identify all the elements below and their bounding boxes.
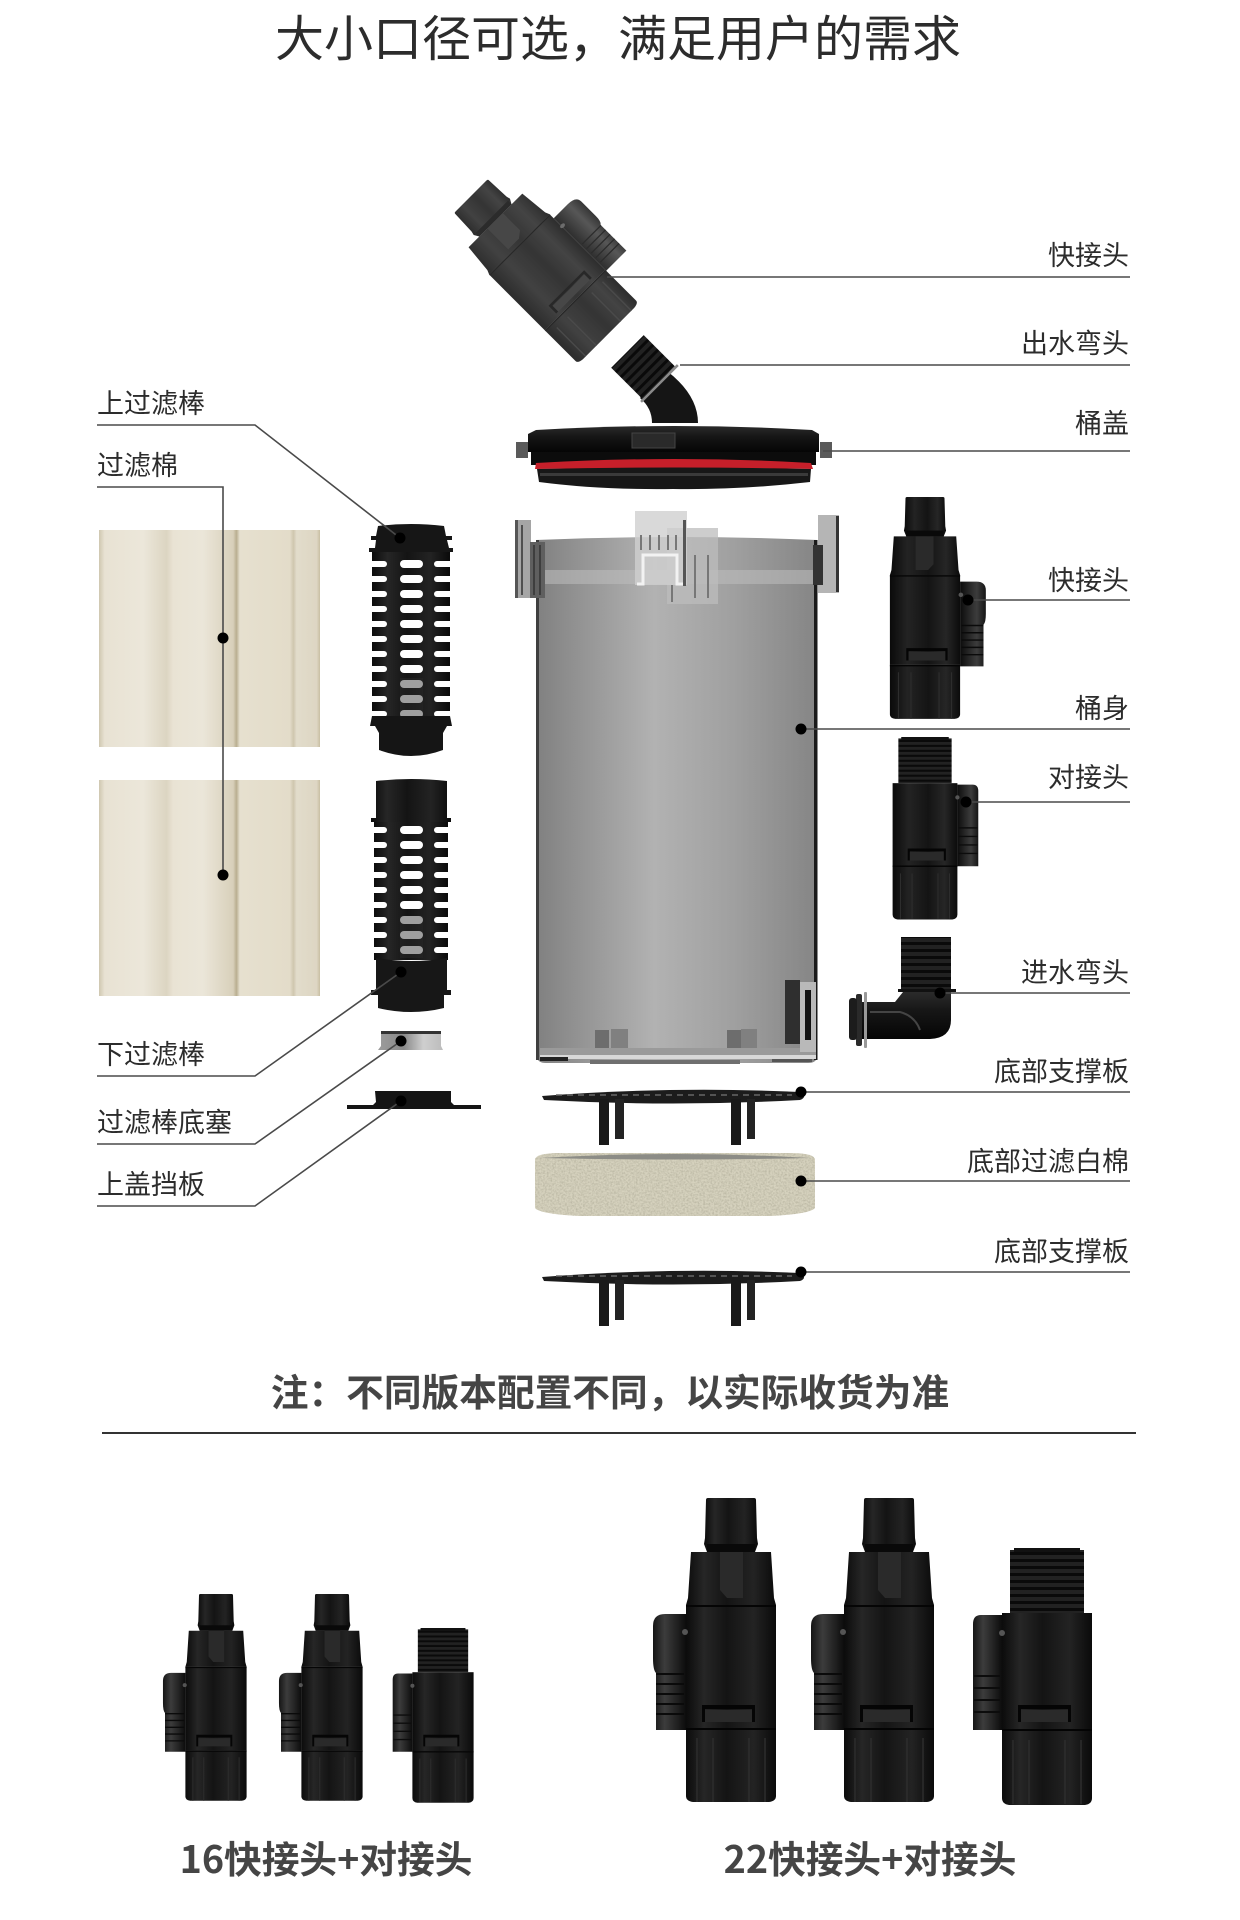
label: bottom white foam: 底部过滤白棉 <box>967 1147 1129 1177</box>
label: bottom white foam <box>796 1147 1130 1186</box>
label: support plate upper: 底部支撑板 <box>994 1057 1129 1087</box>
panel: filter foam upper <box>99 530 320 747</box>
label: upper filter rod: 上过滤棒 <box>97 389 205 419</box>
bucket lid <box>516 426 832 489</box>
label: support plate lower <box>796 1237 1130 1278</box>
callouts right <box>607 241 1130 1278</box>
quick connector right <box>890 497 986 719</box>
label: bucket lid: 桶盖 <box>1075 409 1129 439</box>
butt connector right <box>893 737 978 919</box>
lower filter rod <box>371 779 451 1012</box>
label: rod bottom plug <box>97 1036 406 1144</box>
label: filter foam: 过滤棉 <box>97 451 178 481</box>
upper filter rod <box>369 524 453 756</box>
label: butt connector <box>960 763 1130 808</box>
support plate lower <box>542 1271 804 1326</box>
label: inlet elbow: 进水弯头 <box>1021 958 1129 988</box>
label: support plate upper <box>796 1057 1130 1098</box>
label: quick connector <box>962 566 1130 606</box>
label: bucket body: 桶身 <box>1075 694 1129 724</box>
label: lower filter rod: 下过滤棒 <box>97 1040 205 1070</box>
support plate upper <box>542 1090 804 1145</box>
22 size connector set <box>653 1498 1092 1805</box>
label: quick connector top: 快接头 <box>1048 241 1129 271</box>
22 caption: 22快接头+对接头 <box>724 1829 1016 1884</box>
outlet elbow <box>609 333 698 423</box>
centre clip <box>635 511 718 604</box>
panel: filter foam lower <box>99 780 320 996</box>
inlet elbow <box>849 937 956 1048</box>
angled quick connector <box>441 144 661 364</box>
label: filter foam <box>97 451 228 880</box>
callouts left <box>97 389 406 1206</box>
16 size connector set <box>163 1594 474 1803</box>
title: 大小口径可选，满足用户的需求 <box>275 13 961 67</box>
label: inlet elbow <box>934 958 1130 998</box>
divider <box>102 1432 1136 1434</box>
label: upper filter rod <box>97 389 406 544</box>
label: lower filter rod <box>97 966 406 1076</box>
bottom filter white foam <box>535 1153 815 1216</box>
label: butt connector: 对接头 <box>1048 763 1129 793</box>
label: outlet elbow: 出水弯头 <box>1021 329 1129 359</box>
label: bucket body <box>796 694 1130 734</box>
left clip <box>515 520 545 598</box>
label: cover baffle <box>97 1096 406 1206</box>
label: rod bottom plug: 过滤棒底塞 <box>97 1108 232 1138</box>
filter rod bottom plug <box>378 1031 443 1050</box>
label: support plate lower: 底部支撑板 <box>994 1237 1129 1267</box>
note: 注：不同版本配置不同，以实际收货为准 <box>271 1362 949 1417</box>
label: cover baffle: 上盖挡板 <box>97 1170 205 1200</box>
16 caption: 16快接头+对接头 <box>180 1829 472 1884</box>
label: quick connector: 快接头 <box>1048 566 1129 596</box>
bucket body <box>515 511 839 1064</box>
bucket feet <box>540 1029 816 1064</box>
right clip <box>813 515 839 593</box>
outlet bracket <box>785 980 816 1052</box>
cover baffle <box>347 1091 481 1109</box>
